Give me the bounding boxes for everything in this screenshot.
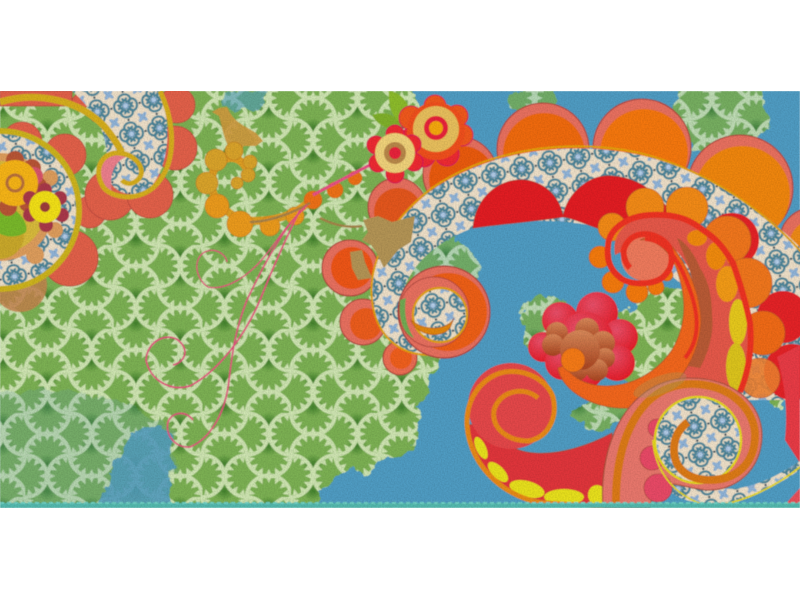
lower spiral pink lobes [640, 419, 672, 502]
pink stem [313, 164, 372, 195]
vine spiral body [211, 158, 315, 221]
lower spiral orange band [616, 384, 755, 508]
panel: large arch petals [322, 99, 800, 375]
swirl inner lens petals [687, 230, 747, 391]
left tile disc [0, 131, 79, 289]
flower: small gold [367, 125, 423, 183]
arch gold edge [372, 146, 800, 355]
left green leaves [0, 210, 27, 237]
arch petal 5 [689, 134, 794, 227]
curl yellow scallops [471, 435, 606, 505]
panel: main paisley swirl [558, 215, 751, 408]
background: faded lower-left tint [0, 388, 175, 520]
background: green scale pattern [0, 91, 800, 508]
curl tail [467, 423, 612, 508]
leaves [389, 91, 412, 124]
left petal middle [340, 299, 386, 345]
panel: orange petals around main swirl [589, 187, 800, 400]
left gold curl [99, 91, 172, 197]
pink trailing strands [146, 205, 307, 447]
green crescent beside spiral [400, 298, 414, 338]
flower: gold [0, 151, 47, 216]
red flower brown centre [542, 318, 615, 381]
small spiral tail [411, 318, 454, 335]
panel: left paisley group [0, 87, 197, 312]
arch petal 2 [422, 138, 496, 194]
lower spiral tile band [655, 455, 800, 504]
flower: yellow [23, 183, 69, 232]
panel: lower tile spiral [602, 367, 800, 508]
left petal upper [322, 240, 378, 296]
icon: bird [212, 106, 264, 148]
arch petal 1 [367, 178, 425, 222]
left petal lower [383, 341, 417, 375]
left red petals [0, 87, 197, 286]
paper grain overlay [0, 91, 800, 508]
panel: lower-left red curl [467, 363, 612, 508]
arch petal 3 [496, 102, 590, 160]
panel: lower-right red shapes [777, 345, 800, 508]
left inner orange scallop disc [0, 153, 63, 264]
red spiral line [608, 215, 751, 392]
vine lobes [196, 142, 362, 237]
brown scallops [677, 238, 712, 368]
swoosh head [561, 348, 585, 372]
gold foil patch [350, 216, 415, 280]
arch petal 4 [592, 98, 692, 169]
grunge speckle over swirl join [631, 367, 689, 403]
left paisley tile fill [72, 91, 167, 194]
pink swirl centre [100, 154, 126, 191]
panel: red swirl with flower [528, 292, 638, 388]
left lower brown petal [0, 278, 48, 312]
curl orange ring [467, 372, 610, 507]
orange swoosh [558, 238, 701, 408]
background: blue wash [98, 91, 800, 504]
arch petal 6 [780, 209, 800, 248]
illustration: paisley swirl artwork [0, 91, 800, 508]
flower: large red [398, 95, 473, 167]
red heart shape [472, 174, 667, 229]
small spiral tile disc [413, 288, 467, 342]
rope [250, 203, 362, 227]
lower spiral tile disc [655, 397, 741, 483]
panel: orange vine scroll [196, 142, 372, 237]
lower spiral yellow edge [653, 440, 800, 506]
bottom teal strip [0, 503, 800, 508]
lower spiral pink disc [602, 378, 762, 508]
swirl centre [621, 233, 669, 281]
red flower [528, 292, 638, 388]
panel: flowers with leaves [367, 91, 473, 183]
panel: tile arch band [372, 146, 800, 400]
left inner yellow ring [0, 160, 40, 248]
panel: small spiral [398, 266, 490, 358]
curl disc [468, 363, 554, 449]
swirl body [614, 215, 749, 400]
